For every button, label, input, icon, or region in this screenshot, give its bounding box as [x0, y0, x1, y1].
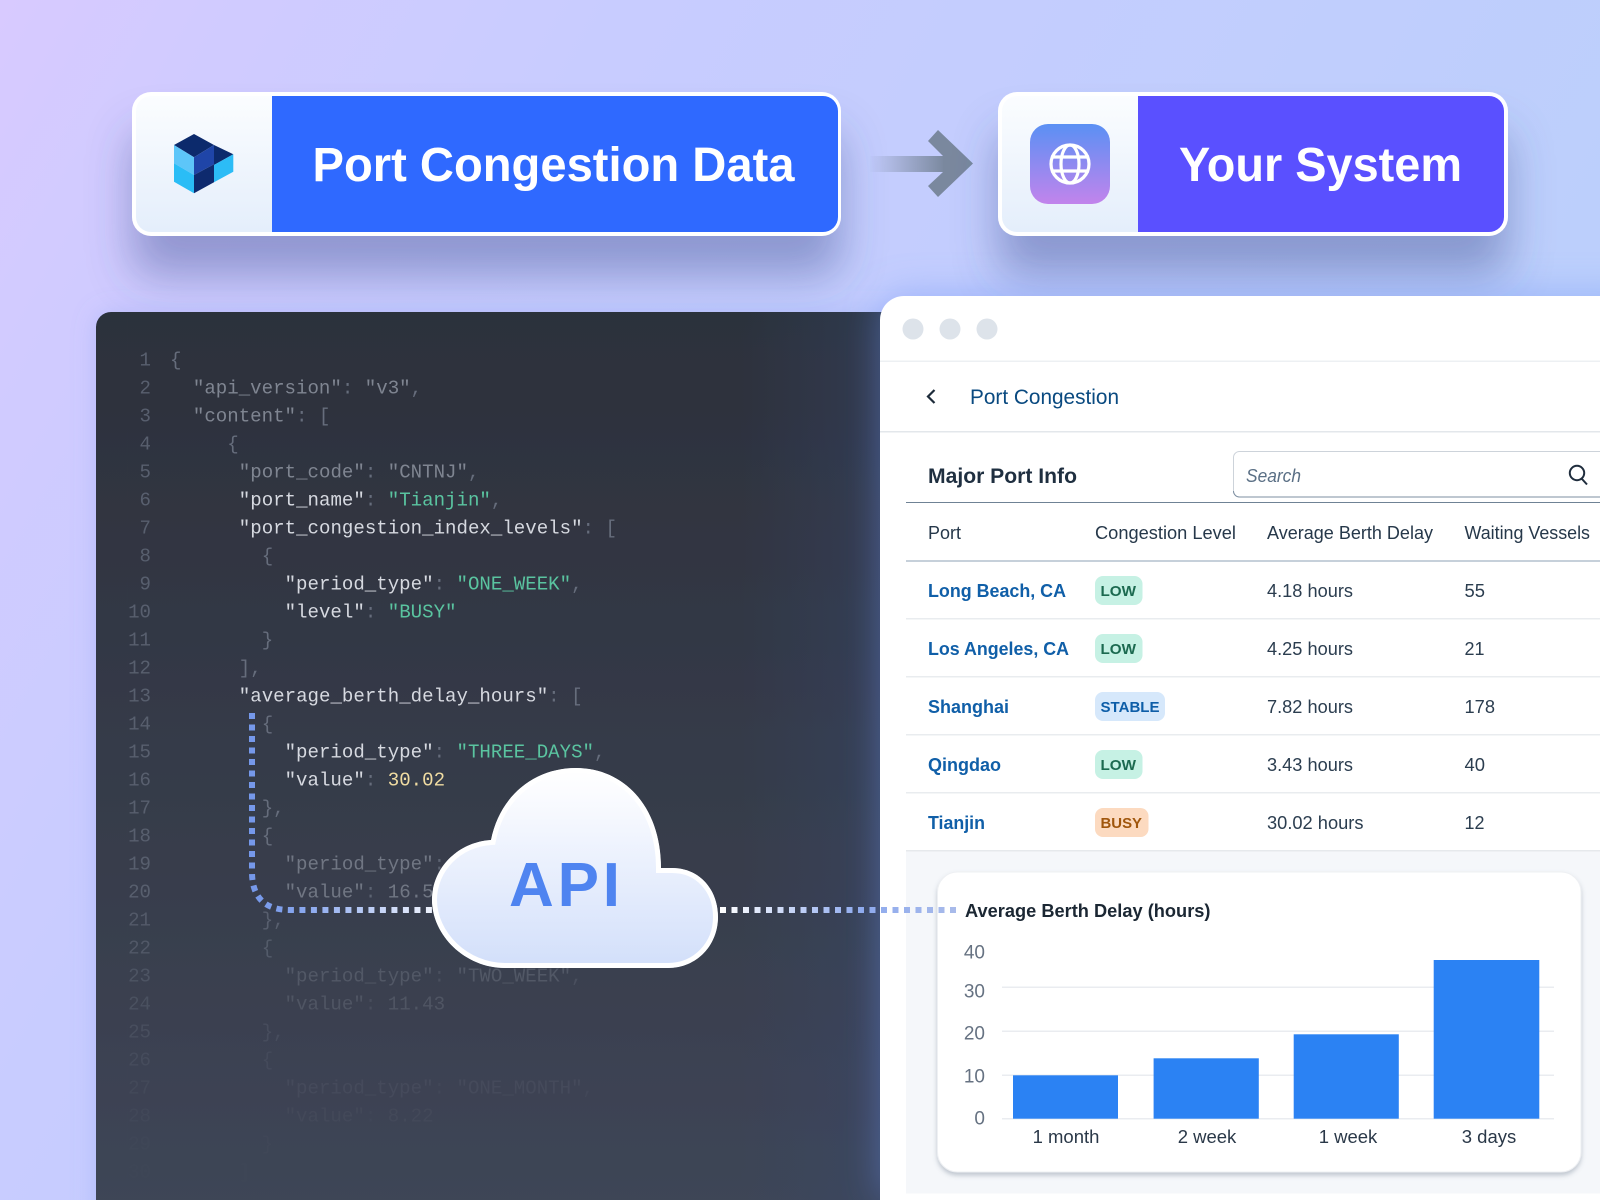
- line numbers: 6: [140, 490, 151, 512]
- table row: Los Angeles: 4.25 hours: [1267, 638, 1353, 659]
- JSON text: },: [262, 798, 285, 820]
- table row: Shanghai: Shanghai: [928, 696, 1009, 717]
- JSON text: "level": "BUSY": [285, 602, 456, 624]
- bar chart: [1013, 960, 1539, 1119]
- icon: stacked cubes logo: [174, 134, 233, 193]
- line numbers: 17: [128, 798, 151, 820]
- JSON text: "period_type": "ONE_MONTH",: [285, 1078, 594, 1100]
- line numbers: 1: [140, 350, 151, 372]
- card title: Your System: [1179, 139, 1462, 192]
- JSON text: {: [262, 826, 273, 848]
- line numbers: 24: [128, 994, 151, 1016]
- table row: Tianjin: BUSY: [1100, 815, 1142, 832]
- line numbers: 27: [128, 1078, 151, 1100]
- JSON text: "api_version": "v3",: [193, 378, 422, 400]
- line numbers: 15: [128, 742, 151, 764]
- JSON text: "port_code": "CNTNJ",: [239, 462, 479, 484]
- JSON text: {: [262, 938, 273, 960]
- line numbers: 25: [128, 1022, 151, 1044]
- table row: Qingdao: 3.43 hours: [1267, 754, 1353, 775]
- dotted connector: code to API: [252, 713, 434, 910]
- table row: Tianjin: 30.02 hours: [1267, 812, 1364, 833]
- table row: Long Beach: 4.18 hours: [1267, 580, 1353, 601]
- table row: Qingdao: Qingdao: [928, 754, 1001, 775]
- table header: [928, 522, 1590, 543]
- table header: Congestion Level: [1095, 522, 1236, 543]
- JSON text: {: [170, 350, 181, 372]
- table row: Los Angeles: Los Angeles, CA: [928, 638, 1069, 659]
- icon: globe tile: [1030, 124, 1110, 204]
- back chevron: [928, 390, 934, 403]
- JSON text: "value": 30.02: [285, 770, 445, 792]
- x axis labels: 1 week: [1319, 1126, 1378, 1147]
- line numbers: 18: [128, 826, 151, 848]
- table row: Tianjin: 12: [1464, 812, 1484, 833]
- page title: Port Congestion: [970, 386, 1119, 409]
- table row: Los Angeles: [928, 634, 1484, 663]
- table header: Port: [928, 522, 961, 543]
- chart card: [938, 872, 1581, 1172]
- table row: Tianjin: Tianjin: [928, 812, 985, 833]
- x axis labels: 1 month: [1033, 1126, 1099, 1147]
- table header: Average Berth Delay: [1267, 522, 1434, 543]
- line numbers: 22: [128, 938, 151, 960]
- JSON text: "port_congestion_index_levels": [: [239, 518, 617, 540]
- JSON text: },: [262, 1022, 285, 1044]
- JSON text: {: [262, 714, 273, 736]
- line numbers: 10: [128, 602, 151, 624]
- JSON text: "content": [: [193, 406, 330, 428]
- y axis labels: [964, 942, 985, 1130]
- API cloud: [432, 768, 718, 968]
- JSON text: "value": 8.22: [285, 1106, 434, 1128]
- line numbers: 28: [128, 1106, 151, 1128]
- line numbers: 19: [128, 854, 151, 876]
- x axis labels: 3 days: [1462, 1126, 1516, 1147]
- table row: Shanghai: [928, 692, 1495, 721]
- chart title: Average Berth Delay (hours): [965, 900, 1210, 921]
- dotted connector: API to chart: [720, 907, 958, 913]
- section heading: Major Port Info: [928, 465, 1077, 488]
- JSON text: "value": 16.53: [285, 882, 445, 904]
- line numbers: 14: [128, 714, 151, 736]
- line numbers: 8: [140, 546, 151, 568]
- line numbers: 23: [128, 966, 151, 988]
- JSON text: "period_type": "ONE_WEEK",: [285, 574, 583, 596]
- table header: Waiting Vessels: [1464, 522, 1590, 543]
- table row: Qingdao: LOW: [1100, 757, 1137, 774]
- line numbers: 26: [128, 1050, 151, 1072]
- JSON text: {: [262, 546, 273, 568]
- table row: Qingdao: [928, 750, 1485, 779]
- JSON text: "value": 11.43: [285, 994, 445, 1016]
- table row: Shanghai: STABLE: [1100, 699, 1160, 716]
- table row: Shanghai: 7.82 hours: [1267, 696, 1353, 717]
- JSON text: ]: [239, 1162, 250, 1184]
- JSON text: ],: [239, 658, 262, 680]
- y axis labels: 20: [964, 1024, 985, 1044]
- table row: Tianjin: [928, 808, 1484, 837]
- card: Port Congestion Data: [132, 92, 841, 236]
- line numbers: 4: [140, 434, 151, 456]
- line numbers: 16: [128, 770, 151, 792]
- line numbers: 5: [140, 462, 151, 484]
- JSON text: }: [262, 630, 273, 652]
- JSON text: "period_type": "THREE_DAYS",: [285, 742, 605, 764]
- search box: Search: [1246, 465, 1301, 486]
- line numbers: 2: [140, 378, 151, 400]
- line numbers: 20: [128, 882, 151, 904]
- table row: Qingdao: 40: [1464, 754, 1485, 775]
- card title: Port Congestion Data: [312, 139, 795, 192]
- JSON text: }: [262, 1134, 273, 1156]
- chart section background: [906, 852, 1600, 1194]
- y axis labels: 0: [974, 1108, 985, 1130]
- x axis labels: [1033, 1126, 1516, 1147]
- line numbers: 9: [140, 574, 151, 596]
- table row: Long Beach: [928, 576, 1485, 605]
- line numbers: 12: [128, 658, 151, 680]
- JSON text: {: [262, 1050, 273, 1072]
- line numbers: 29: [128, 1134, 151, 1156]
- line numbers: 30: [128, 1162, 151, 1184]
- line numbers: 11: [128, 630, 151, 652]
- JSON text: "port_name": "Tianjin",: [239, 490, 502, 512]
- line numbers: 13: [128, 686, 151, 708]
- panel: Port Congestion app window: [880, 296, 1600, 1200]
- line numbers: 7: [140, 518, 151, 540]
- y axis labels: 30: [964, 982, 985, 1002]
- panel: JSON code: [96, 312, 996, 1200]
- table row: Long Beach: LOW: [1100, 583, 1137, 600]
- line numbers: 21: [128, 910, 151, 932]
- table row: Los Angeles: 21: [1464, 638, 1484, 659]
- search box: [1234, 452, 1600, 497]
- table row: Shanghai: 178: [1464, 696, 1495, 717]
- API label: API: [509, 851, 620, 920]
- JSON text: "average_berth_delay_hours": [: [239, 686, 583, 708]
- JSON text: },: [262, 910, 285, 932]
- y axis labels: 40: [964, 942, 985, 964]
- x axis labels: 2 week: [1178, 1126, 1237, 1147]
- table row: Long Beach: Long Beach, CA: [928, 580, 1066, 601]
- line numbers: [128, 350, 151, 1184]
- y axis labels: 10: [964, 1066, 985, 1088]
- table row: Long Beach: 55: [1464, 580, 1485, 601]
- card: Your System: [998, 92, 1508, 236]
- line numbers: 3: [140, 406, 151, 428]
- JSON text: [170, 350, 617, 1184]
- JSON text: "period_type": "ONE_WEEK",: [285, 854, 583, 876]
- JSON text: {: [227, 434, 239, 456]
- window controls: [902, 318, 998, 340]
- arrow: [870, 130, 973, 197]
- JSON text: "period_type": "TWO_WEEK",: [285, 966, 583, 988]
- table row: Los Angeles: LOW: [1100, 641, 1137, 658]
